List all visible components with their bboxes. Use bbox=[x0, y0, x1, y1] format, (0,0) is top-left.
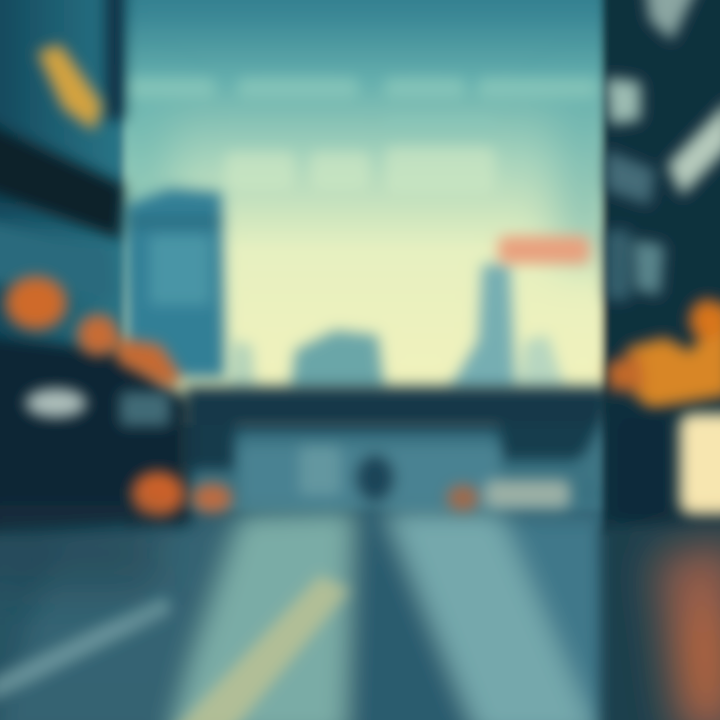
right building bbox=[602, 0, 720, 535]
right orange sign bbox=[606, 300, 720, 408]
sky teal side shading bbox=[110, 90, 610, 290]
bridge bbox=[185, 386, 610, 470]
left building yellow sign bbox=[38, 45, 102, 130]
orange street blobs left bbox=[132, 472, 232, 516]
left white sign bbox=[26, 389, 86, 417]
blurred sky headline shapes bbox=[225, 147, 495, 193]
left pale window bbox=[120, 392, 170, 426]
distant tower right bbox=[448, 262, 566, 390]
right building pale stripes bbox=[606, 0, 720, 300]
orange rooftop sign bbox=[498, 236, 590, 264]
right dark lower wall bbox=[615, 415, 670, 520]
left building dark bands bbox=[0, 0, 190, 535]
street under the bridge bbox=[240, 445, 500, 505]
road surface bbox=[0, 510, 720, 720]
pale road streak left bbox=[0, 595, 172, 702]
right road backing bbox=[600, 525, 720, 720]
left road shadow bbox=[0, 520, 160, 590]
sky background bbox=[0, 0, 720, 530]
orange street reflection right bbox=[655, 540, 720, 720]
street vehicles right bbox=[447, 400, 640, 511]
road lighter reflections bbox=[0, 510, 630, 720]
right glowing storefront bbox=[680, 414, 720, 514]
blurred sky banner text shapes bbox=[125, 78, 598, 130]
yellow road line bbox=[165, 575, 350, 720]
left building bbox=[0, 0, 190, 535]
distant skyline centre bbox=[228, 330, 385, 390]
under-bridge street backdrop bbox=[185, 425, 615, 535]
distant building left bbox=[125, 188, 226, 378]
left orange awnings bbox=[6, 277, 182, 388]
